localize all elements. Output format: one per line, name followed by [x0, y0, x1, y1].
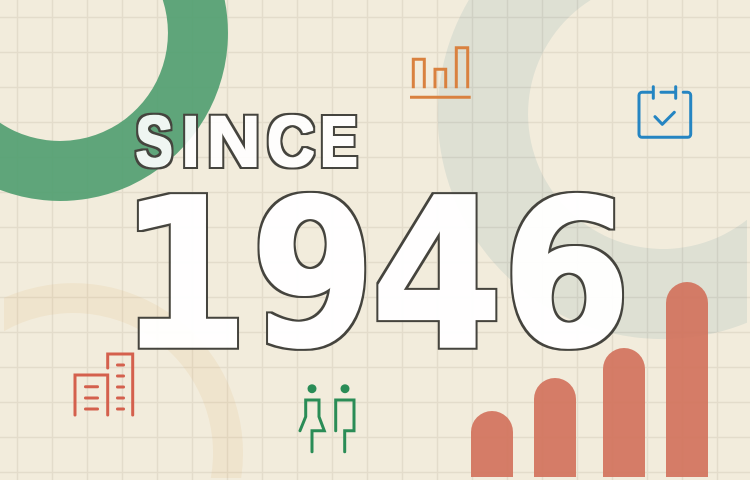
heading: year 1946: 9: [251, 157, 375, 394]
green ring: [0, 0, 228, 201]
heading: year 1946: 4: [371, 154, 503, 396]
heading: SINCE: [136, 102, 358, 182]
heading: year 1946: 1: [119, 153, 249, 396]
heading: SINCE: E: [320, 102, 358, 182]
icon: office buildings: [75, 354, 133, 415]
heading: year 1946: [119, 153, 631, 396]
icon: bar chart: [410, 48, 471, 97]
icon: two people: [300, 384, 354, 452]
icon: calendar with check: [639, 87, 691, 137]
heading: SINCE: I: [182, 103, 199, 182]
grey ring: [438, 0, 747, 339]
heading: year 1946: 6: [502, 156, 631, 393]
beige ring: [4, 283, 243, 478]
heading: SINCE: N: [207, 103, 261, 182]
heading: SINCE: C: [267, 102, 315, 182]
heading: SINCE: S: [136, 102, 173, 182]
bar chart: rising red bars: [471, 282, 708, 477]
